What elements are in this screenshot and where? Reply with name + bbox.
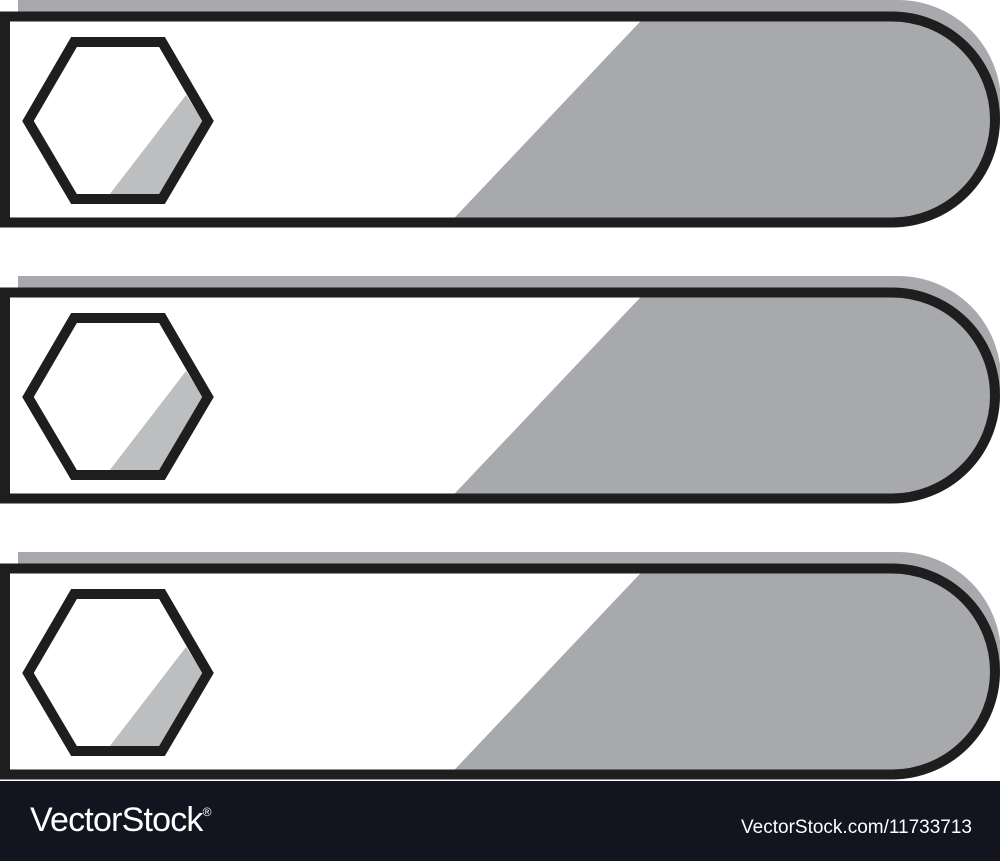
brand logo text: VectorStock® (30, 801, 211, 839)
bar 1 (5, 0, 1000, 222)
bar 3 (5, 552, 1000, 774)
bar 2 (5, 276, 1000, 498)
image id: VectorStock.com/11733713 (741, 817, 972, 838)
footer (0, 781, 1000, 861)
